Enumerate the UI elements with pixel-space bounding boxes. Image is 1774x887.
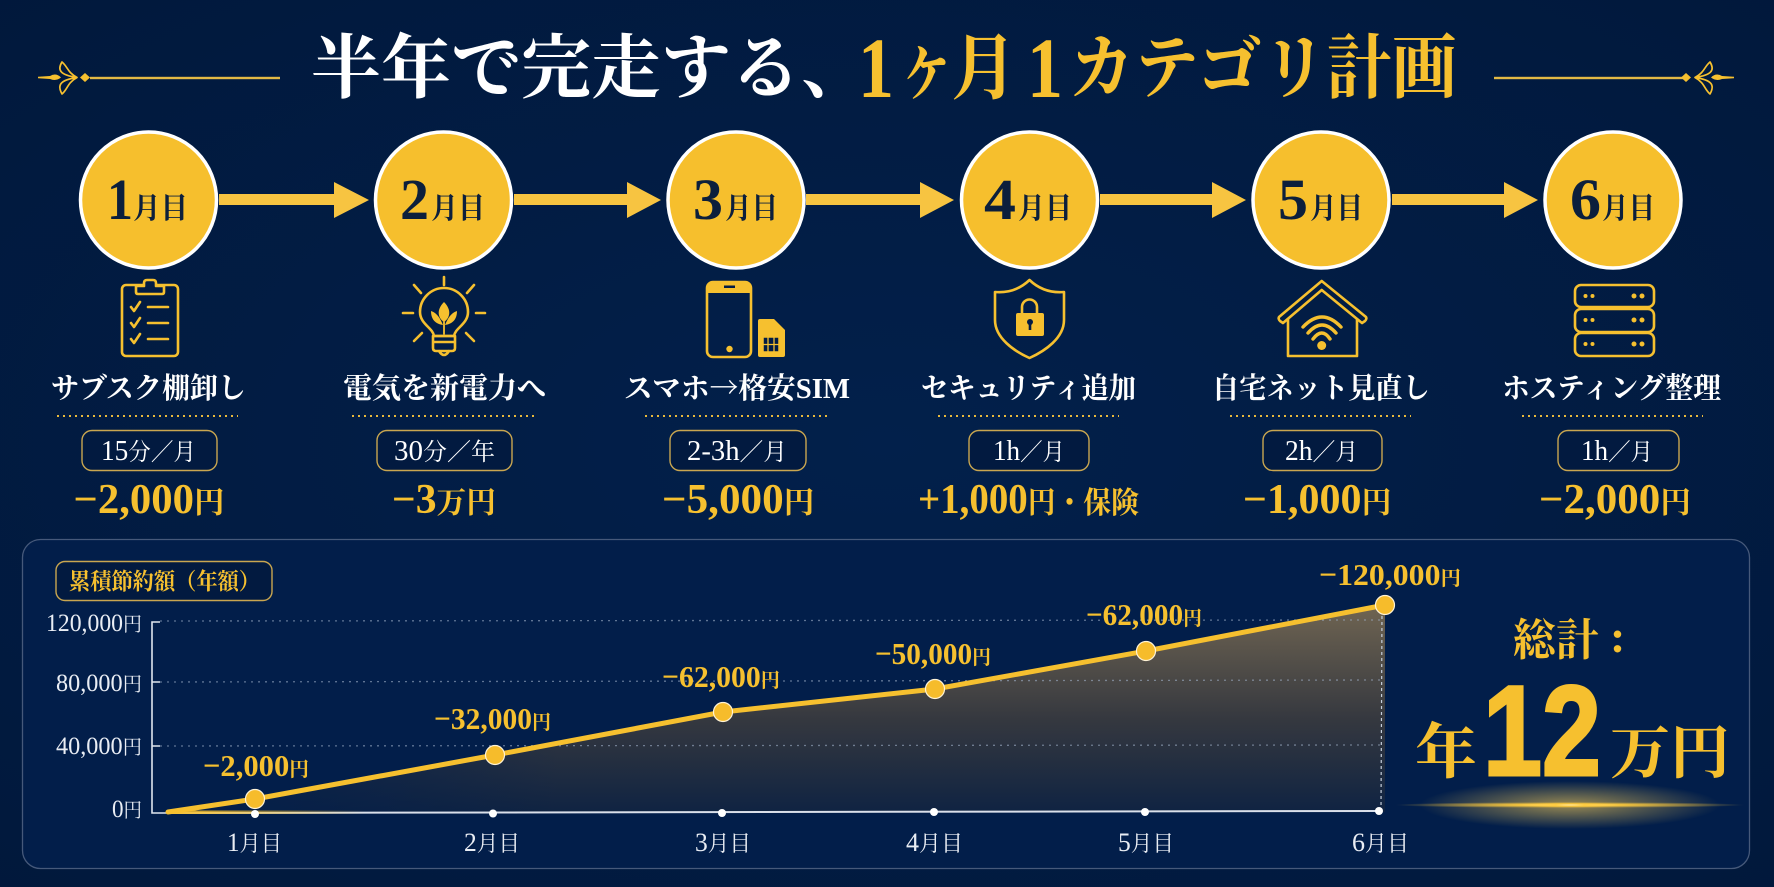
icon: smartphone and SIM card: [707, 282, 785, 357]
time chip: [377, 430, 512, 470]
step 5: home internet: [1212, 132, 1430, 523]
month badge 6: 6: [1570, 167, 1601, 232]
month badge 6: [1545, 132, 1681, 268]
title: 月: [951, 10, 1017, 114]
data labels: −62,000円: [1086, 597, 1202, 632]
saving amount: −2,000円: [1539, 477, 1691, 523]
label: subscriptions: サブスク棚卸し: [51, 366, 246, 407]
ornament: left title flourish: [38, 62, 280, 94]
gridlines: [160, 610, 1382, 810]
arrow: month 2 to 3: [514, 182, 661, 218]
time chip: [1558, 430, 1679, 470]
month badge 1: 月目: [133, 186, 188, 227]
panel: cumulative savings: [22, 540, 1750, 868]
arrow: month 4 to 5: [1100, 182, 1246, 218]
step 6: hosting: [1502, 132, 1721, 523]
total label: :: [1610, 611, 1625, 662]
data labels: −2,000円: [203, 748, 309, 783]
total label: 総計: [1513, 604, 1599, 668]
savings line: [168, 605, 1385, 812]
title: 半年で完走する、: [311, 12, 871, 113]
line chart: [46, 557, 1461, 857]
icon: clipboard checklist: [122, 280, 178, 356]
title: [311, 2, 1457, 117]
month badge 3: 月目: [725, 186, 778, 227]
month badge 1: [80, 132, 216, 268]
title: カテゴリ計画: [1069, 12, 1457, 113]
total value: 年: [1415, 705, 1477, 791]
time chip: [82, 430, 217, 470]
saving amount: −1,000円: [1243, 477, 1391, 523]
total value: 万円: [1610, 706, 1730, 790]
title: 1: [858, 20, 894, 116]
step 4: security: [918, 132, 1139, 523]
month badge 2: 月目: [431, 186, 485, 227]
axes: [152, 622, 168, 813]
chart heading chip: 累積節約額（年額）: [69, 563, 260, 596]
month badge 4: 4: [984, 167, 1016, 232]
month badge 2: [376, 132, 512, 268]
time chip: [969, 430, 1089, 470]
title: ヶ: [897, 2, 957, 117]
time chip: 15分／月: [101, 435, 196, 467]
time chip: 1h／月: [1581, 435, 1653, 467]
label: hosting: ホスティング整理: [1502, 366, 1721, 407]
x axis labels: 5月目: [1118, 828, 1174, 857]
label: home internet: 自宅ネット見直し: [1212, 366, 1430, 407]
label: electricity: 電気を新電力へ: [343, 366, 546, 407]
month badge 3: 3: [693, 167, 723, 232]
title: 1: [1027, 20, 1063, 116]
icon: house with wifi: [1279, 281, 1366, 356]
label: security: セキュリティ追加: [921, 366, 1136, 407]
data labels: −32,000円: [434, 701, 551, 736]
x axis labels: 3月目: [695, 828, 751, 857]
ornament: right title flourish: [1494, 62, 1734, 94]
saving amount: −3万円: [392, 477, 496, 523]
y axis labels: [46, 610, 142, 823]
time chip: 2-3h／月: [687, 435, 787, 467]
step 1: subscription review: [51, 132, 246, 523]
x axis labels: 1月目: [227, 828, 282, 857]
total value: 12: [1483, 660, 1601, 803]
y axis labels: 40,000円: [56, 733, 142, 760]
month badge 1: 1: [107, 167, 133, 232]
area under line: [168, 605, 1385, 812]
data labels: −62,000円: [662, 659, 780, 694]
month badge 4: 月目: [1018, 186, 1072, 227]
time chip: [670, 430, 806, 470]
x axis ticks: [251, 807, 1383, 818]
icon: server rack: [1575, 285, 1654, 356]
month badge 5: 5: [1278, 167, 1308, 232]
x axis labels: 2月目: [464, 828, 520, 857]
saving amount: −2,000円: [74, 477, 225, 523]
cost amount: +1,000円・保険: [918, 477, 1139, 523]
arrow: month 1 to 2: [219, 182, 369, 218]
data labels: −50,000円: [875, 636, 991, 671]
data points: [246, 596, 1394, 808]
x axis labels: [227, 828, 1409, 857]
time chip: [1263, 430, 1382, 470]
month badge 2: 2: [400, 167, 429, 232]
month badge 5: 月目: [1310, 186, 1363, 227]
y axis labels: 120,000円: [46, 610, 142, 637]
time chip: 1h／月: [993, 435, 1065, 467]
month badge 5: [1253, 132, 1389, 268]
x axis labels: 6月目: [1352, 828, 1409, 857]
y axis labels: 0円: [112, 796, 142, 823]
step 3: phone and SIM: [624, 132, 850, 523]
saving amount: −5,000円: [662, 477, 814, 523]
arrow: month 3 to 4: [806, 182, 954, 218]
month badge 6: 月目: [1602, 186, 1655, 227]
total callout: [1395, 604, 1745, 829]
time chip: 2h／月: [1285, 435, 1358, 467]
glow under total: [1395, 781, 1745, 829]
icon: light bulb with leaf: [403, 277, 485, 355]
data labels: −120,000円: [1319, 557, 1461, 592]
time chip: 30分／年: [394, 435, 495, 467]
icon: shield with padlock: [995, 280, 1064, 358]
arrow: month 5 to 6: [1392, 182, 1538, 218]
month badge 4: [962, 132, 1098, 268]
step 2: electricity: [343, 132, 546, 523]
data labels: [203, 557, 1461, 783]
x axis labels: 4月目: [906, 828, 963, 857]
total value: [1415, 660, 1730, 803]
y axis labels: 80,000円: [56, 670, 142, 697]
month badge 3: [668, 132, 804, 268]
label: phone to budget SIM: スマホ→格安SIM: [624, 366, 850, 407]
